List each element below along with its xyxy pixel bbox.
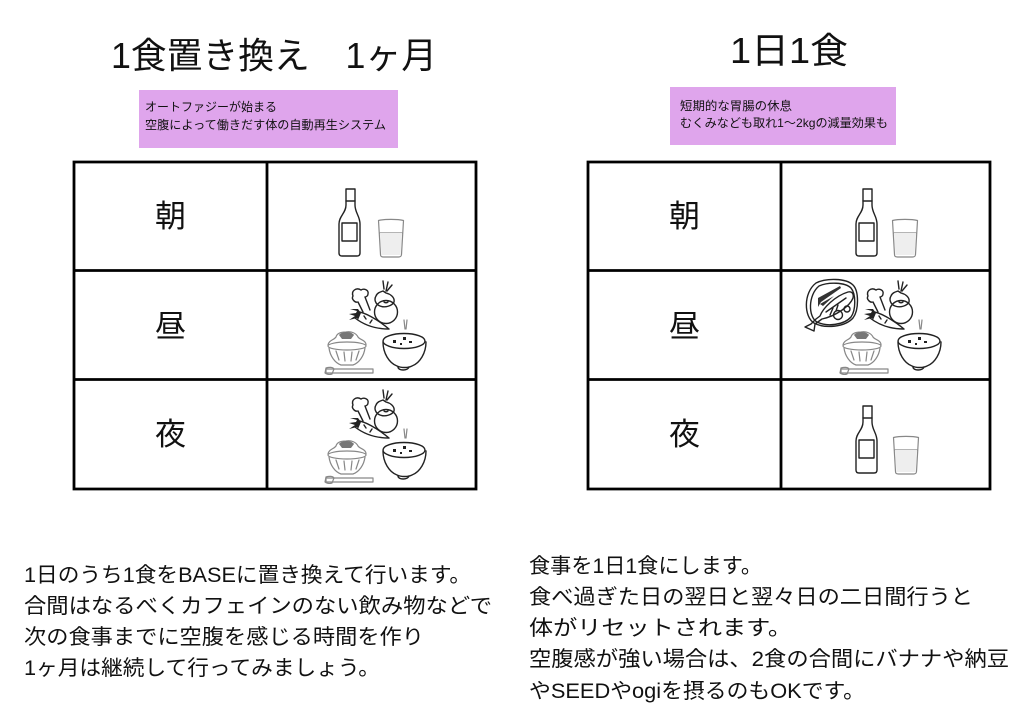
- label: night: 夜: [669, 417, 700, 452]
- text block: left description: 合間はなるべくカフェインのない飲み物などで: [24, 595, 492, 618]
- text block: left description: 1ヶ月は継続して行ってみましょう。: [24, 657, 380, 680]
- label: morning: 朝: [155, 199, 186, 234]
- table: left schedule: [74, 162, 476, 489]
- title: one meal a day: 1日1食: [730, 30, 848, 71]
- icon: bottle morning: [339, 189, 360, 256]
- icon: food noon: [325, 281, 426, 374]
- icon: food night: [325, 390, 426, 483]
- callout: short-term rest: 短期的な胃腸の休息: [680, 98, 792, 113]
- text block: right description: 空腹感が強い場合は、2食の合間にバナナや納豆: [529, 648, 1009, 671]
- icon: glass morning: [378, 219, 404, 257]
- text block: right description: やSEEDやogiを摂るのもOKです。: [529, 680, 865, 703]
- text block: left description: 次の食事までに空腹を感じる時間を作り: [24, 626, 424, 649]
- text block: right description: 食べ過ぎた日の翌日と翌々日の二日間行うと: [529, 586, 973, 609]
- text block: right description: 食事を1日1食にします。: [529, 555, 762, 578]
- text block: left description: [24, 564, 492, 680]
- label: noon: 昼: [669, 309, 700, 344]
- icon: bottle morning: [856, 189, 877, 256]
- label: noon: 昼: [155, 309, 186, 344]
- title: 1 meal replacement: 1食置き換え 1ヶ月: [111, 35, 437, 76]
- icon: bottle night: [856, 406, 877, 473]
- icon: fish plate: [805, 279, 858, 331]
- text block: left description: 1日のうち1食をBASEに置き換えて行います。: [24, 564, 471, 587]
- icon: glass morning: [892, 219, 918, 257]
- icon: glass night: [894, 436, 918, 474]
- callout: autophagy: 空腹によって働きだす体の自動再生システム: [145, 118, 386, 132]
- label: morning: 朝: [669, 199, 700, 234]
- callout: autophagy: [139, 90, 398, 148]
- callout: short-term rest: むくみなども取れ1〜2kgの減量効果も: [680, 115, 888, 130]
- label: night: 夜: [155, 417, 186, 452]
- text block: right description: 体がリセットされます。: [529, 617, 792, 640]
- callout: autophagy: オートファジーが始まる: [145, 99, 277, 114]
- icon: food noon: [840, 281, 941, 374]
- text block: right description: [529, 555, 1009, 703]
- table: right schedule: [588, 162, 990, 489]
- callout: short-term rest: [670, 87, 896, 145]
